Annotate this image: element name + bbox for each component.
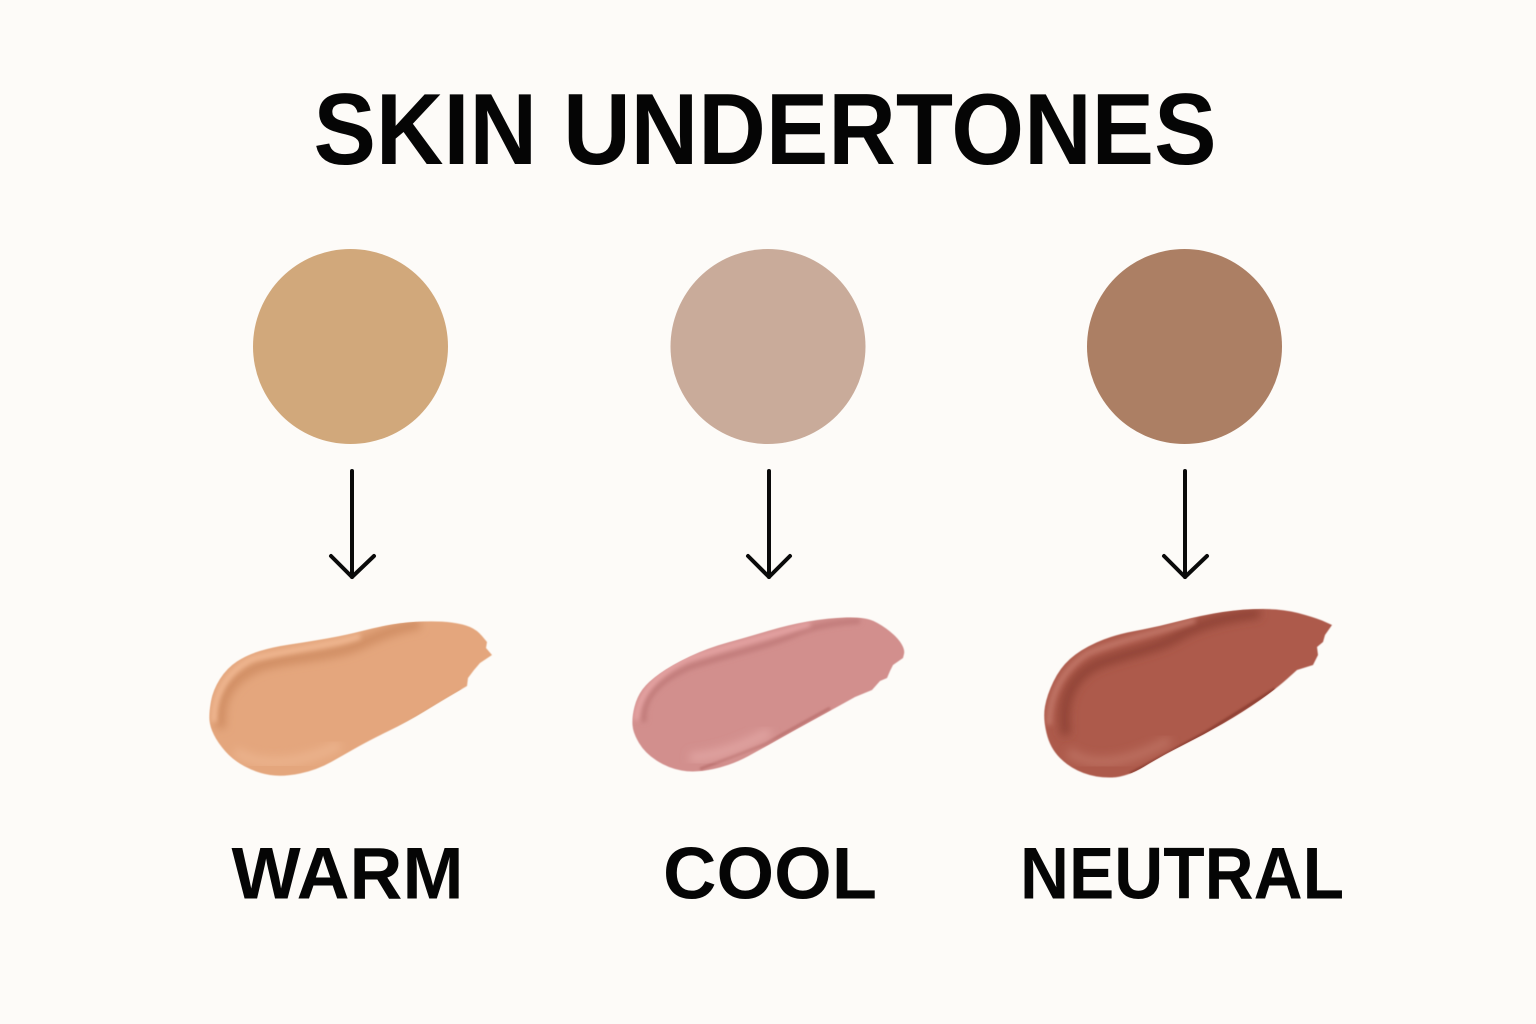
swatch: cool circle [670,249,866,444]
arrow: cool [748,471,790,577]
arrow: warm [331,471,374,577]
arrow: neutral [1164,471,1207,577]
label: neutral: NEUTRAL [1020,834,1344,914]
smear: neutral [1044,609,1332,778]
swatch: warm circle [253,249,448,444]
title: SKIN UNDERTONES [314,74,1216,186]
label: cool: COOL [663,834,877,914]
label: warm: WARM [232,834,464,914]
smear: cool [632,617,904,771]
swatch: neutral circle [1087,249,1282,444]
smear: warm [209,621,492,776]
